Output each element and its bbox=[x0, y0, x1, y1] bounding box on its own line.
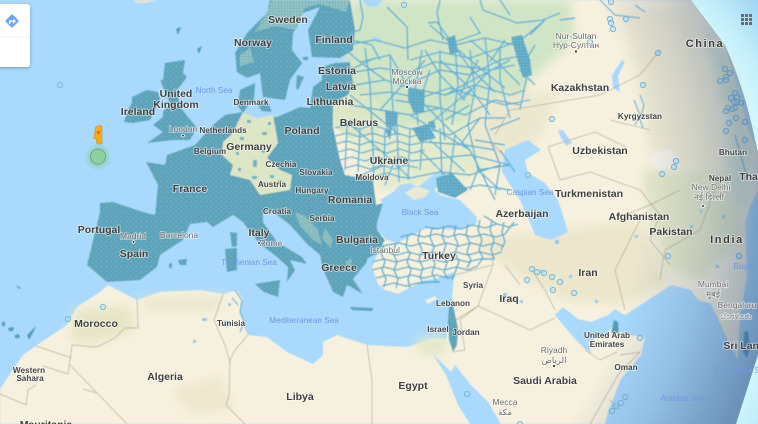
UAE coverage bbox=[611, 320, 619, 333]
small country labels: Czechia bbox=[266, 160, 297, 169]
Denmark bbox=[238, 83, 272, 113]
country labels: Iran bbox=[578, 267, 598, 279]
Teal coverage: Europe mainland bbox=[87, 62, 385, 297]
country labels: Latvia bbox=[326, 81, 356, 93]
country labels: Poland bbox=[284, 125, 320, 137]
city labels: मुंबई bbox=[706, 289, 721, 300]
dense coverage clusters bbox=[385, 35, 532, 198]
country labels: Libya bbox=[286, 391, 314, 403]
country labels: Turkmenistan bbox=[555, 188, 623, 200]
country labels: Finland bbox=[315, 34, 353, 46]
city labels: Riyadh bbox=[541, 345, 567, 355]
inland lakes bbox=[362, 0, 625, 146]
small country labels: Hungary bbox=[295, 186, 329, 195]
country labels: Kingdom bbox=[153, 99, 199, 111]
panel: directions control bbox=[0, 4, 30, 67]
country labels: United bbox=[160, 88, 192, 100]
country labels: Ukraine bbox=[370, 155, 408, 167]
country labels: Germany bbox=[226, 141, 272, 153]
city labels: Rome bbox=[260, 238, 283, 248]
sparse coverage in northern Scandinavia bbox=[240, 0, 350, 66]
Great Britain bbox=[147, 60, 197, 143]
water labels: Black Sea bbox=[402, 208, 439, 217]
small country labels: Western bbox=[13, 366, 45, 375]
water labels: Arabian Sea bbox=[660, 394, 706, 403]
country labels: Romania bbox=[328, 194, 372, 206]
small lakes and rivers in Asia bbox=[193, 210, 725, 343]
large spaced labels: India bbox=[710, 234, 744, 246]
city labels: مكة bbox=[498, 407, 512, 417]
Ireland bbox=[124, 90, 160, 123]
large spaced labels bbox=[686, 38, 744, 246]
water labels: Caspian Sea bbox=[507, 188, 554, 197]
small country labels: Lebanon bbox=[436, 299, 470, 308]
country labels: Iraq bbox=[499, 293, 519, 305]
small country labels bbox=[13, 98, 747, 383]
city labels: الرياض bbox=[542, 355, 566, 365]
city labels: Mecca bbox=[492, 397, 518, 407]
water labels: Tyrrhenian Sea bbox=[221, 258, 277, 267]
small country labels: Bhutan bbox=[719, 148, 747, 157]
Black Sea bbox=[377, 172, 477, 243]
green location circle bbox=[84, 143, 112, 171]
small country labels: Belgium bbox=[194, 147, 226, 156]
city labels: Mumbai bbox=[698, 279, 728, 289]
icon: directions diamond bbox=[5, 14, 19, 28]
small country labels: Moldova bbox=[355, 173, 389, 182]
Red Sea bbox=[433, 355, 501, 424]
country labels: Norway bbox=[234, 37, 272, 49]
Crimea bbox=[405, 187, 430, 200]
small country labels: Netherlands bbox=[199, 126, 247, 135]
small country labels: Austria bbox=[258, 180, 287, 189]
road coverage network: Turkey bbox=[372, 216, 518, 288]
small country labels: United Arab bbox=[584, 331, 630, 340]
country labels: Algeria bbox=[147, 371, 183, 383]
country labels: Uzbekistan bbox=[572, 145, 628, 157]
small islands bbox=[169, 57, 373, 311]
Atlantic islands bbox=[2, 27, 202, 340]
city labels: Madrid bbox=[120, 231, 146, 241]
city labels: Barcelona bbox=[160, 230, 198, 240]
Sri Lanka bbox=[743, 331, 750, 358]
icon: orange pegman bbox=[94, 126, 102, 144]
city labels: London bbox=[169, 124, 197, 134]
small country labels: Nepal bbox=[709, 174, 731, 183]
small country labels: Oman bbox=[614, 363, 638, 372]
small country labels: Emirates bbox=[590, 340, 625, 349]
city labels: Москва bbox=[392, 76, 422, 86]
city labels: Bengaluru bbox=[718, 300, 757, 310]
small country labels: Serbia bbox=[309, 214, 335, 223]
country labels: France bbox=[173, 183, 207, 195]
country labels: Morocco bbox=[74, 318, 118, 330]
icon: apps grid bbox=[741, 14, 752, 25]
small country labels: Syria bbox=[463, 281, 483, 290]
small country labels: Israel bbox=[427, 325, 449, 334]
large spaced labels: China bbox=[686, 38, 724, 50]
country labels: Egypt bbox=[398, 380, 428, 392]
country labels: Kazakhstan bbox=[551, 82, 609, 94]
water labels bbox=[196, 86, 758, 403]
small country labels: Sahara bbox=[16, 374, 44, 383]
country labels: Bulgaria bbox=[336, 234, 378, 246]
small country labels: Jordan bbox=[452, 328, 480, 337]
country labels: Italy bbox=[248, 227, 270, 239]
country labels: Pakistan bbox=[649, 226, 693, 238]
small country labels: Kyrgyzstan bbox=[618, 112, 662, 121]
water labels: Mediterranean Sea bbox=[269, 316, 339, 325]
city labels: New Delhi bbox=[692, 182, 730, 192]
country labels: Greece bbox=[321, 262, 357, 274]
teal patches in Germany bbox=[236, 120, 282, 185]
country labels: Portugal bbox=[78, 224, 120, 236]
white Himalaya patch bbox=[650, 148, 680, 170]
Cyprus bbox=[425, 296, 437, 304]
country labels: Ireland bbox=[121, 106, 155, 118]
country labels: Turkey bbox=[422, 250, 456, 262]
city labels: नई दिल्ली bbox=[694, 192, 725, 202]
city labels: Нур-Султан bbox=[553, 40, 599, 50]
capital city markers bbox=[132, 50, 704, 368]
city labels bbox=[120, 31, 757, 417]
country labels: Lithuania bbox=[307, 96, 353, 108]
country labels: Azerbaijan bbox=[495, 208, 549, 220]
road coverage network: Russia north bbox=[340, 0, 575, 150]
Balkan uncovered patches bbox=[295, 212, 352, 270]
water labels: North Sea bbox=[196, 86, 233, 95]
Scandinavia and Finland bbox=[235, 0, 355, 100]
country labels: Spain bbox=[120, 248, 148, 260]
city labels: ಬೆಂಗಳೂರು bbox=[720, 311, 752, 321]
country labels: Sweden bbox=[268, 14, 308, 26]
country labels: Saudi Arabia bbox=[513, 375, 577, 387]
city labels: Istanbul bbox=[370, 245, 400, 255]
small country labels: Slovakia bbox=[299, 168, 333, 177]
Belarus bbox=[333, 92, 383, 138]
country labels: Belarus bbox=[340, 117, 378, 129]
city labels: Nur-Sultan bbox=[556, 31, 597, 41]
small country labels: Tunisia bbox=[217, 319, 245, 328]
country labels: Estonia bbox=[318, 65, 356, 77]
Israel coverage bbox=[448, 305, 458, 352]
Caspian Sea bbox=[502, 140, 568, 240]
small country labels: Denmark bbox=[233, 98, 269, 107]
road coverage network: Ukraine and south Russia bbox=[335, 90, 520, 200]
small country labels: Croatia bbox=[263, 207, 292, 216]
country labels: Afghanistan bbox=[609, 211, 669, 223]
Iceland tip bbox=[133, 0, 157, 3]
road coverage network: Tunisia, Asia and Gulf streaks bbox=[232, 0, 748, 332]
Germany and Austria uncovered area bbox=[222, 112, 292, 195]
city labels: Moscow bbox=[391, 67, 423, 77]
water labels: Bay of bbox=[733, 262, 757, 271]
